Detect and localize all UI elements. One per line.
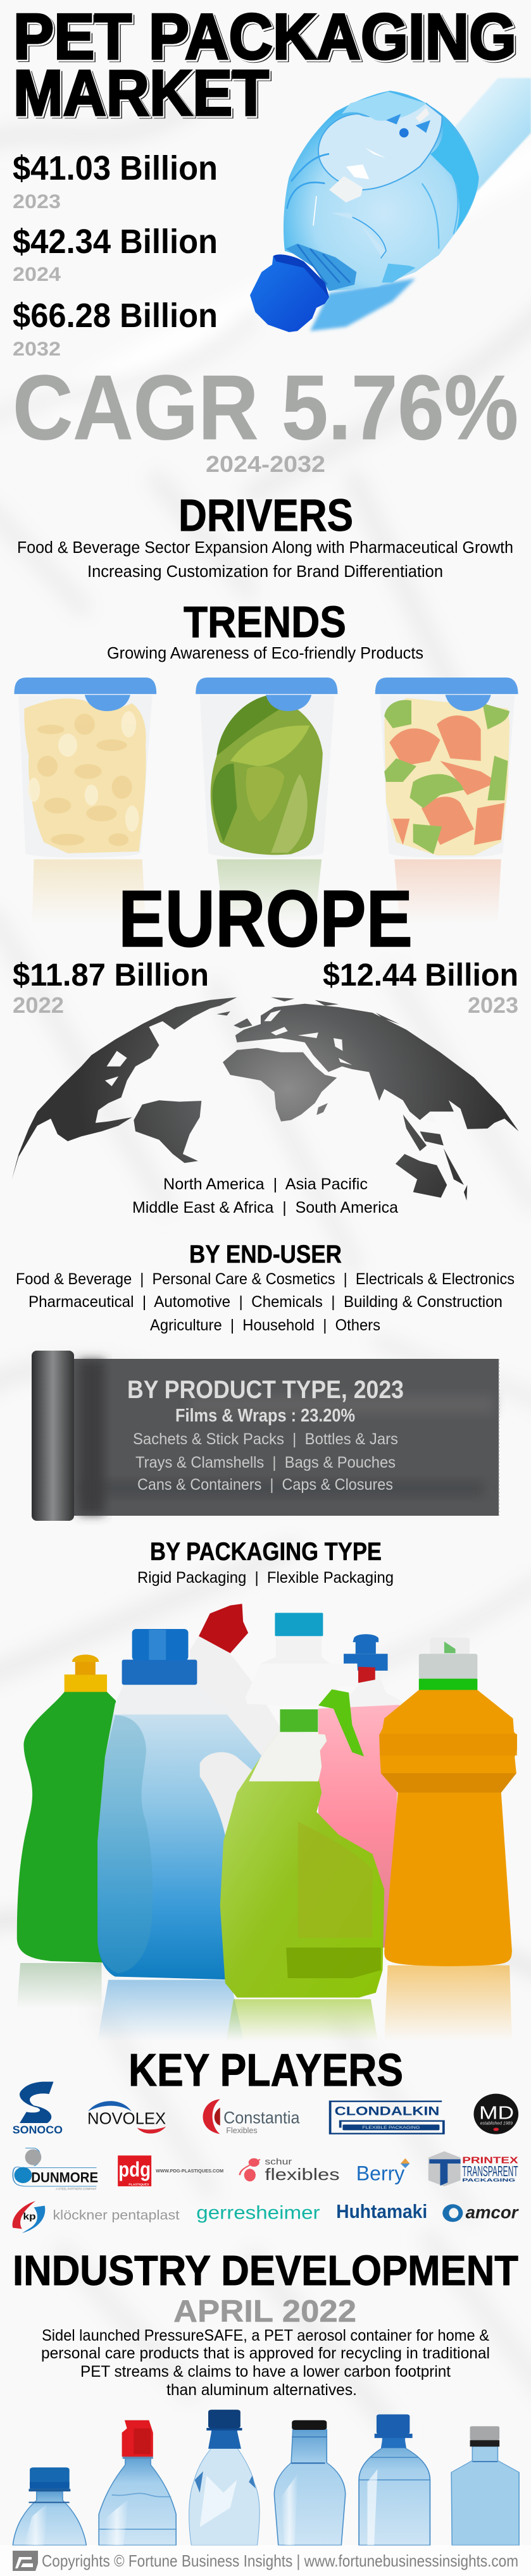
jar: green leaves bbox=[196, 678, 337, 924]
arctic and european islands bbox=[216, 997, 399, 1028]
logo: Printex Transparent Packaging: PACKAGING bbox=[462, 2178, 516, 2183]
title bbox=[13, 1, 516, 129]
Europe value 2023: 2023 bbox=[468, 993, 518, 1018]
by packaging type heading: BY PACKAGING TYPE bbox=[150, 1538, 382, 1566]
jar: pasta shells bbox=[14, 678, 156, 924]
logo: MD bbox=[473, 2094, 518, 2134]
product type list: Cans & Containers | Caps & Closures bbox=[137, 1476, 393, 1494]
films and wraps share: Films & Wraps : 23.20% bbox=[175, 1406, 355, 1426]
logo: PDG Plastiques: WWW.PDG-PLASTIQUES.COM bbox=[156, 2169, 223, 2174]
end-user list bbox=[16, 1270, 515, 1334]
logo: Clondalkin bbox=[330, 2102, 444, 2134]
detergent bottles bbox=[17, 1604, 517, 2041]
logo: Klockner Pentaplast: kp bbox=[23, 2212, 36, 2222]
end-user list: Agriculture | Household | Others bbox=[150, 1316, 380, 1334]
film roll bbox=[32, 1351, 74, 1521]
market value 2024: $42.34 Billion bbox=[13, 223, 218, 261]
by end-user heading: BY END-USER bbox=[189, 1241, 342, 1268]
logo: Berry bbox=[356, 2158, 409, 2185]
packaging type list: Rigid Packaging | Flexible Packaging bbox=[137, 1569, 394, 1587]
drivers text: Food & Beverage Sector Expansion Along with Pharmaceutical Growth bbox=[17, 539, 513, 557]
logo: Printex Transparent Packaging bbox=[428, 2152, 518, 2186]
drivers text: Increasing Customization for Brand Differentiation bbox=[87, 563, 443, 581]
market value 2024 bbox=[13, 223, 218, 285]
logo: Gerresheimer: gerresheimer bbox=[196, 2202, 320, 2223]
development text: PET streams & claims to have a lower carbon footprint bbox=[80, 2363, 451, 2381]
development text: than aluminum alternatives. bbox=[166, 2381, 357, 2399]
end-user list: Pharmaceutical | Automotive | Chemicals | Building & Construction bbox=[28, 1293, 503, 1311]
food jars bbox=[14, 678, 518, 924]
PET bottles row bbox=[13, 2410, 519, 2545]
logo: Schur Flexibles bbox=[240, 2157, 340, 2184]
market value 2032 bbox=[13, 297, 218, 360]
company logos bbox=[13, 2082, 519, 2233]
footer bbox=[13, 2551, 518, 2571]
footer background bbox=[0, 2545, 531, 2576]
logo: Clondalkin: CLONDALKIN bbox=[335, 2105, 439, 2118]
logo: Printex Transparent Packaging: PRINTEX bbox=[462, 2155, 518, 2165]
logo: PDG Plastiques: PLASTIQUES bbox=[128, 2184, 149, 2186]
logo: Schur Flexibles: schur bbox=[265, 2157, 292, 2167]
map water cut-outs bbox=[105, 1010, 437, 1123]
CAGR: 2024-2032 bbox=[206, 451, 325, 477]
logo: Klockner Pentaplast bbox=[13, 2201, 180, 2233]
australia bbox=[396, 1154, 447, 1198]
drivers text bbox=[17, 539, 513, 581]
bottle 2 bbox=[99, 2420, 177, 2545]
market value 2032: 2032 bbox=[13, 337, 61, 360]
trends text: Growing Awareness of Eco-friendly Products bbox=[107, 645, 423, 662]
market value 2023: 2023 bbox=[13, 190, 61, 213]
madagascar bbox=[316, 1103, 328, 1115]
green bottle bbox=[17, 1655, 116, 1963]
title: MARKET bbox=[13, 57, 269, 129]
Europe heading: EUROPE bbox=[118, 874, 413, 963]
logo: Constantia Flexibles: Constantia bbox=[223, 2108, 300, 2127]
logo: Sonoco: SONOCO bbox=[13, 2124, 63, 2136]
eurasia bbox=[235, 1004, 519, 1131]
bottle 6 bbox=[451, 2426, 519, 2545]
bottle 5 bbox=[359, 2415, 430, 2545]
market value 2023 bbox=[13, 149, 218, 213]
drivers heading: DRIVERS bbox=[178, 491, 353, 541]
logo: Clondalkin: FLEXIBLE PACKAGING bbox=[362, 2125, 420, 2129]
bottle reflections bbox=[17, 1963, 512, 2041]
key players heading: KEY PLAYERS bbox=[128, 2045, 403, 2096]
bottle 3 bbox=[189, 2410, 259, 2545]
logo: Klockner Pentaplast: klöckner pentaplast bbox=[53, 2208, 180, 2223]
title: PET PACKAGING bbox=[13, 1, 516, 73]
Europe value 2022: $11.87 Billion bbox=[13, 957, 209, 993]
logo: Constantia Flexibles bbox=[203, 2099, 300, 2135]
pink bottle bbox=[318, 1634, 406, 1948]
regions list bbox=[132, 1175, 398, 1217]
logo: Dunmore bbox=[13, 2148, 98, 2191]
red cap bottle bbox=[190, 1604, 288, 1841]
south east asia islands bbox=[403, 1115, 467, 1201]
market value 2024: 2024 bbox=[13, 263, 61, 285]
development text: Sidel launched PressureSAFE, a PET aerosol container for home & bbox=[42, 2327, 489, 2344]
north america bbox=[12, 997, 237, 1179]
logo: PDG Plastiques bbox=[118, 2155, 223, 2186]
logo: Huhtamaki: Huhtamaki bbox=[336, 2200, 427, 2222]
end-user list: Food & Beverage | Personal Care & Cosmetics | Electricals & Electronics bbox=[16, 1270, 515, 1288]
logo: PDG Plastiques: pdg bbox=[118, 2158, 151, 2181]
logo: Schur Flexibles: flexibles bbox=[265, 2166, 340, 2184]
icon: blue water bottle bbox=[250, 78, 531, 332]
product type list: Sachets & Stick Packs | Bottles & Jars bbox=[133, 1430, 398, 1448]
bottle 4 bbox=[274, 2420, 346, 2545]
logo: Dunmore: A STEEL PARTNERS COMPANY bbox=[56, 2188, 97, 2191]
logo: Dunmore: DUNMORE bbox=[31, 2170, 98, 2186]
market value 2032: $66.28 Billion bbox=[13, 297, 218, 335]
jar: farfalle pasta bbox=[375, 678, 518, 924]
market value 2023: $41.03 Billion bbox=[13, 149, 218, 187]
development text: personal care products that is approved for recycling in traditional bbox=[41, 2344, 490, 2362]
africa bbox=[223, 1048, 337, 1122]
product type list: Trays & Clamshells | Bags & Pouches bbox=[135, 1454, 396, 1471]
panel: by product type film roll bbox=[32, 1351, 499, 1521]
logo: Novolex: NOVOLEX bbox=[87, 2110, 166, 2127]
logo: Constantia Flexibles: Flexibles bbox=[226, 2126, 258, 2135]
blue jug bbox=[97, 1629, 281, 1980]
development text bbox=[41, 2327, 490, 2399]
Europe value 2023 bbox=[323, 957, 518, 1018]
logo: Sonoco bbox=[13, 2082, 63, 2136]
logo: Amcor bbox=[442, 2203, 519, 2222]
logo: MD: MD bbox=[479, 2103, 514, 2123]
logo: Berry: Berry bbox=[356, 2162, 405, 2185]
Europe value 2022: 2022 bbox=[13, 993, 64, 1018]
Europe value 2023: $12.44 Billion bbox=[323, 957, 518, 993]
bottle 1 bbox=[13, 2467, 86, 2545]
trends heading: TRENDS bbox=[184, 597, 346, 647]
development date: APRIL 2022 bbox=[173, 2294, 356, 2329]
regions list: Middle East & Africa | South America bbox=[132, 1199, 398, 1217]
Europe value 2022 bbox=[13, 957, 209, 1018]
orange bottle bbox=[379, 1638, 517, 1966]
product type list bbox=[133, 1430, 398, 1494]
film sheet bbox=[74, 1359, 499, 1516]
regions list: North America | Asia Pacific bbox=[163, 1175, 368, 1193]
spray bottle bbox=[220, 1613, 384, 1998]
logo: Novolex bbox=[87, 2101, 166, 2134]
icon: Fortune Business Insights logo bbox=[13, 2551, 38, 2571]
south america bbox=[134, 1100, 201, 1163]
world map bbox=[12, 997, 519, 1201]
product type heading: BY PRODUCT TYPE, 2023 bbox=[127, 1376, 404, 1404]
